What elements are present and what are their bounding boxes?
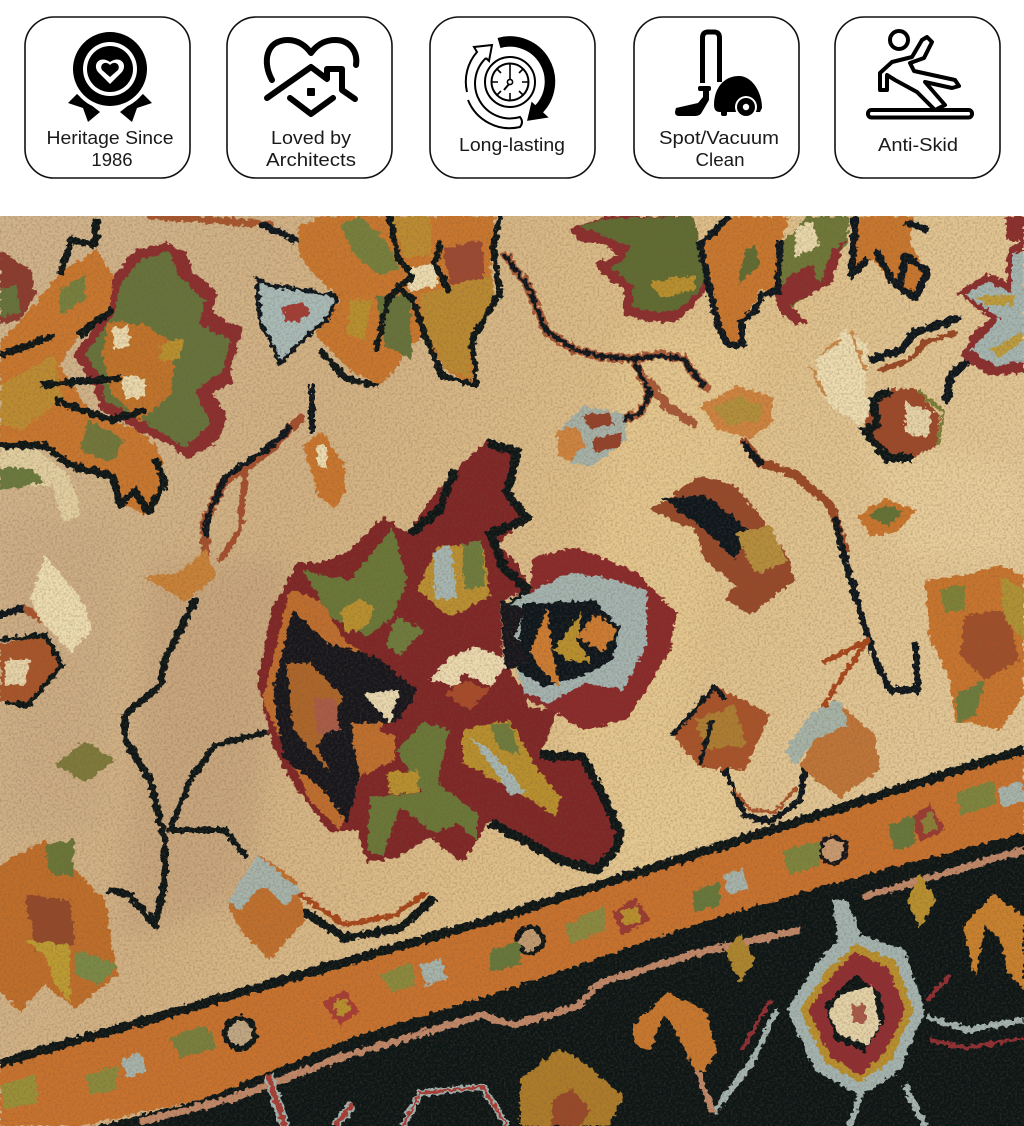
left cream flower (0, 555, 93, 705)
feature card: Spot/Vacuum Clean (634, 17, 799, 178)
feature card: Long-lasting (430, 17, 595, 178)
green leaf bud (858, 498, 917, 536)
orange drop (303, 432, 345, 508)
vines (0, 216, 970, 938)
label: Architects (266, 149, 356, 170)
icon: vacuum cleaner (675, 32, 762, 118)
centre medallion (257, 440, 677, 873)
icon: slipping figure (868, 31, 972, 118)
label: Anti-Skid (878, 134, 958, 155)
label: Heritage Since (46, 127, 174, 148)
small flowers lower right (672, 685, 880, 797)
label: 1986 (91, 149, 133, 170)
right-edge floral (957, 216, 1024, 376)
top-centre floral (257, 216, 500, 386)
feature card: Loved by Architects (227, 17, 392, 178)
lower-centre small flower (228, 855, 305, 960)
border band (0, 750, 1024, 1126)
icon: rosette with heart (68, 28, 152, 122)
field tonal streaks (128, 461, 968, 926)
gold flower (700, 386, 773, 439)
icon: heart and house (267, 40, 356, 114)
label: Loved by (271, 127, 352, 148)
small upper motifs (55, 386, 917, 782)
feature card: Heritage Since 1986 (25, 17, 190, 178)
top-right floral (570, 216, 928, 346)
label: Clean (696, 149, 744, 170)
top-left floral (0, 218, 243, 523)
label: Spot/Vacuum (659, 127, 779, 148)
grey-red flower (556, 406, 627, 466)
icon: clock with arrows (466, 41, 550, 128)
pale flower near top right (810, 330, 943, 459)
border motifs (0, 780, 1024, 1110)
label: Long-lasting (459, 134, 565, 155)
navy lower field (80, 831, 1024, 1126)
bottom-left flower (0, 840, 118, 1012)
right orange flower (925, 565, 1024, 730)
navy field hooks and flowers (268, 873, 1024, 1126)
navy field medallion (713, 900, 1024, 1126)
feature card: Anti-Skid (835, 17, 1000, 178)
dark leaf motif (650, 475, 795, 615)
